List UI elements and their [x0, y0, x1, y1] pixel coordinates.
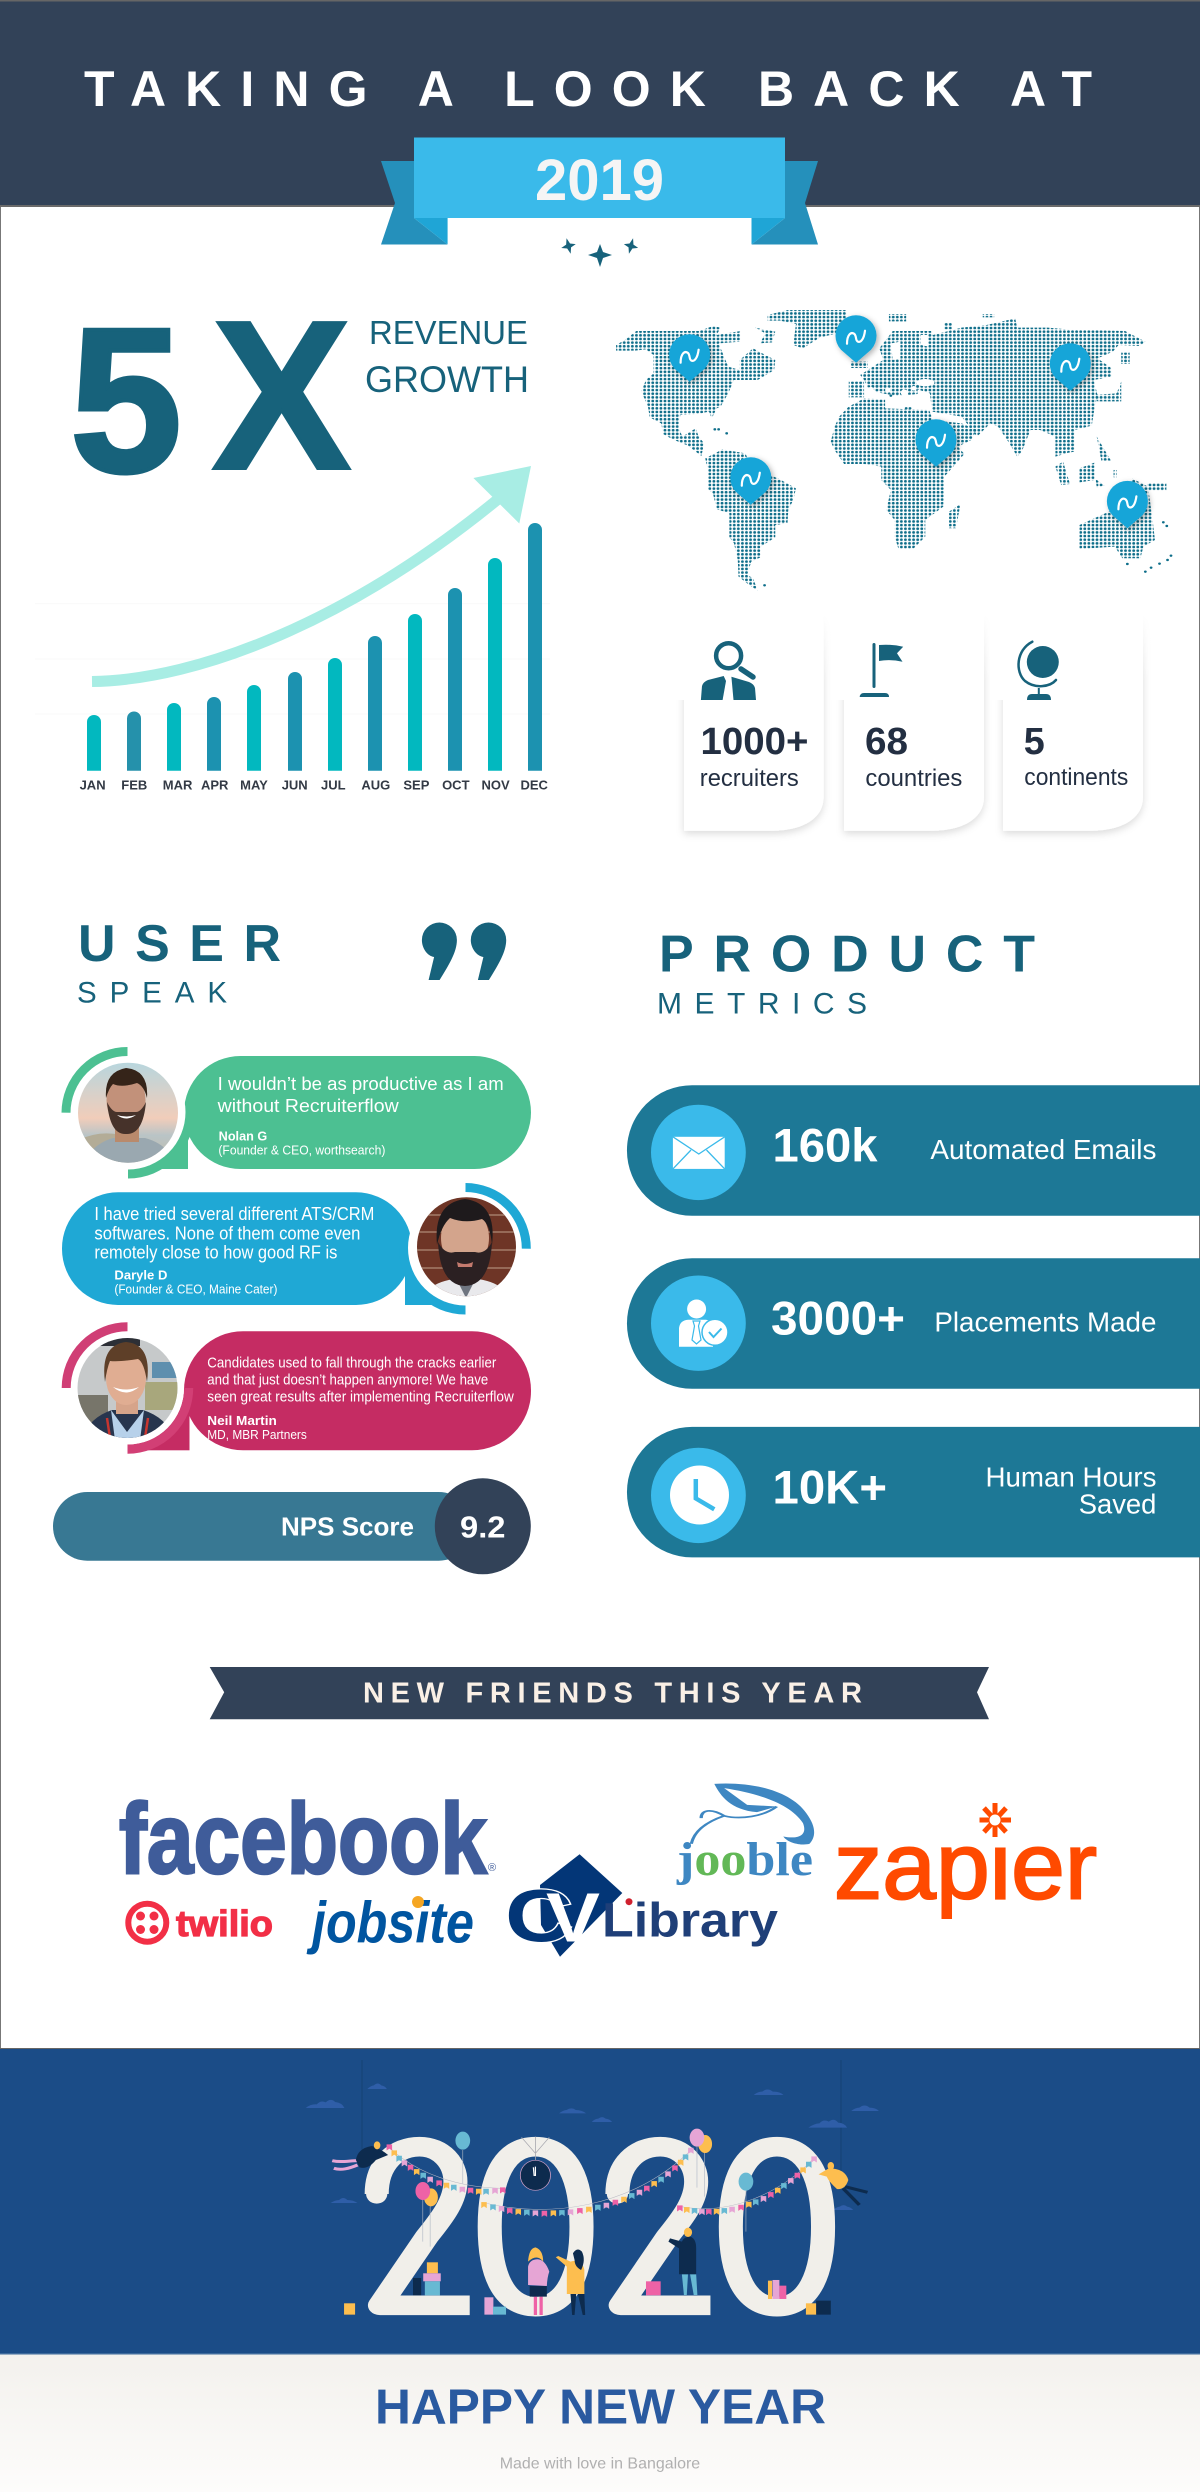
footer panel	[0, 2353, 1200, 2492]
logo: cv library	[505, 1854, 778, 1958]
bar chart: monthly revenue: SEP	[403, 778, 430, 792]
bar chart: monthly revenue	[35, 523, 550, 792]
heading: product metrics: METRICS	[657, 988, 867, 1021]
testimonial: Neil Martin: seen great results after implementing Recruiterflow	[207, 1389, 514, 1405]
testimonial: Nolan G: Nolan G	[219, 1130, 267, 1144]
card: continents: 5	[1024, 721, 1045, 763]
card: countries: countries	[865, 765, 962, 792]
dotted world map	[616, 310, 1172, 591]
bar chart: monthly revenue: MAR	[163, 778, 193, 792]
testimonial: Nolan G: without Recruiterflow	[217, 1095, 399, 1116]
year ribbon: 2019	[535, 148, 664, 213]
footer credit: Made with love in Bangalore	[500, 2455, 700, 2472]
nps score bar: NPS Score	[281, 1512, 414, 1542]
avatar: Nolan G	[78, 1062, 178, 1165]
card: recruiters: recruiters	[700, 765, 799, 792]
bar chart: monthly revenue: JUL	[321, 778, 346, 792]
logo: jooble	[676, 1783, 814, 1886]
heading: product metrics: PRODUCT	[659, 926, 1035, 984]
avatar: Daryle D	[417, 1197, 516, 1296]
metric: placements made	[627, 1258, 1200, 1389]
testimonial: Neil Martin	[66, 1327, 531, 1450]
banner: new friends this year	[210, 1667, 989, 1719]
logo: zapier: zapier	[834, 1813, 1097, 1919]
heading: user speak: SPEAK	[77, 977, 227, 1010]
pin: asia	[1050, 343, 1091, 391]
icon: flag	[860, 643, 903, 697]
logos	[119, 1783, 1097, 1958]
logo: jobsite: jobsite	[306, 1891, 474, 1956]
bar chart: monthly revenue: MAY	[240, 778, 268, 792]
testimonial: Daryle D: Daryle D	[114, 1268, 167, 1282]
testimonial: Neil Martin: Neil Martin	[207, 1413, 277, 1428]
heading: user speak: USER	[78, 915, 281, 973]
metric: placements made: 3000+	[771, 1292, 905, 1344]
stat cards	[670, 598, 1160, 831]
pin: south america	[730, 457, 771, 505]
icon: recruiter with magnifier	[701, 643, 756, 700]
hanging ropes	[362, 2060, 841, 2171]
bar chart: monthly revenue: JUN	[282, 778, 308, 792]
pin: europe	[836, 315, 876, 363]
numerals 2020	[377, 2147, 823, 2307]
metric: automated emails: Automated Emails	[930, 1134, 1156, 1165]
title: TAKING A LOOK BACK AT	[84, 61, 1092, 117]
avatar: Neil Martin	[77, 1338, 178, 1440]
metric: human hours saved: Human Hours	[986, 1462, 1156, 1493]
balloons	[415, 2129, 753, 2247]
icon: globe	[1019, 642, 1059, 700]
heading: product metrics	[657, 926, 1035, 1021]
nps score bar	[53, 1478, 531, 1574]
pin: africa	[916, 419, 956, 467]
bar chart: monthly revenue: DEC	[520, 778, 549, 792]
nps score bar: 9.2	[460, 1509, 506, 1544]
logo: facebook: ®	[488, 1862, 496, 1874]
banner: new friends this year: NEW FRIENDS THIS YEAR	[363, 1678, 862, 1710]
metric: automated emails	[627, 1085, 1200, 1216]
bar chart: monthly revenue: JAN	[80, 778, 106, 792]
testimonial: Daryle D: remotely close to how good RF is	[94, 1242, 337, 1262]
testimonial: Nolan G: (Founder & CEO, worthsearch)	[218, 1144, 385, 1158]
testimonial: Nolan G	[66, 1052, 531, 1178]
logo: twilio: twilio	[176, 1903, 273, 1944]
metric: human hours saved: Saved	[1079, 1489, 1156, 1520]
testimonial: Nolan G: I wouldn’t be as productive as I am	[218, 1073, 504, 1094]
stars	[559, 236, 640, 267]
icon: envelope	[673, 1137, 725, 1169]
bar chart: monthly revenue: NOV	[482, 778, 510, 792]
card: continents	[990, 598, 1160, 831]
growth arrow	[92, 466, 531, 682]
headline: 5X revenue growth: 5	[70, 286, 182, 516]
heading: happy new year: HAPPY NEW YEAR	[375, 2380, 826, 2435]
logo: facebook: facebook	[119, 1783, 487, 1895]
gifts and candles	[344, 2262, 831, 2315]
bar chart: monthly revenue: OCT	[442, 778, 470, 792]
logo: jooble: jooble	[676, 1833, 813, 1886]
bar chart: monthly revenue: FEB	[121, 778, 147, 792]
clock	[520, 2137, 551, 2190]
metric: human hours saved	[627, 1427, 1200, 1557]
header band	[0, 0, 1200, 207]
bar chart: monthly revenue: AUG	[361, 778, 390, 792]
headline: 5X revenue growth: REVENUE	[369, 315, 528, 352]
card: recruiters: 1000+	[700, 721, 808, 763]
logo: cv library: Library	[602, 1895, 778, 1948]
testimonial: Daryle D: I have tried several different ATS/CRM	[94, 1204, 374, 1224]
headline: 5X revenue growth	[70, 276, 529, 516]
bar chart: monthly revenue: APR	[201, 778, 229, 792]
heading: user speak	[77, 915, 281, 1010]
icon: clock	[670, 1466, 729, 1524]
icon: person with check	[679, 1300, 728, 1347]
year ribbon	[381, 138, 818, 244]
metric: human hours saved: 10K+	[772, 1461, 887, 1514]
card: countries	[831, 598, 1001, 831]
testimonial: Daryle D: softwares. None of them come even	[94, 1223, 360, 1243]
bunting	[387, 2145, 817, 2216]
card: continents: continents	[1024, 764, 1128, 791]
testimonial: Neil Martin: Candidates used to fall through the cracks earlier	[207, 1355, 496, 1371]
map pins	[669, 315, 1148, 528]
headline: 5X revenue growth: X	[212, 276, 351, 514]
headline: 5X revenue growth: GROWTH	[365, 358, 529, 400]
clouds	[306, 2083, 879, 2210]
testimonial: Neil Martin: and that just doesn’t happen anymore! We have	[207, 1372, 488, 1388]
pin: north america	[669, 334, 710, 382]
metric: placements made: Placements Made	[934, 1306, 1156, 1338]
icon: quote marks	[422, 922, 506, 980]
testimonial: Daryle D: (Founder & CEO, Maine Cater)	[114, 1282, 277, 1296]
testimonial: Neil Martin: MD, MBR Partners	[207, 1427, 307, 1442]
logo: cv library: V	[546, 1878, 600, 1956]
testimonial: Daryle D	[62, 1188, 526, 1326]
pin: australia	[1107, 481, 1148, 528]
metric: automated emails: 160k	[772, 1118, 878, 1172]
card: recruiters	[670, 598, 840, 831]
people	[332, 2141, 868, 2315]
logo: twilio	[128, 1903, 273, 1944]
card: countries: 68	[865, 721, 908, 763]
2020 illustration panel	[0, 2048, 1200, 2354]
logo: cv library: C	[505, 1874, 573, 1958]
